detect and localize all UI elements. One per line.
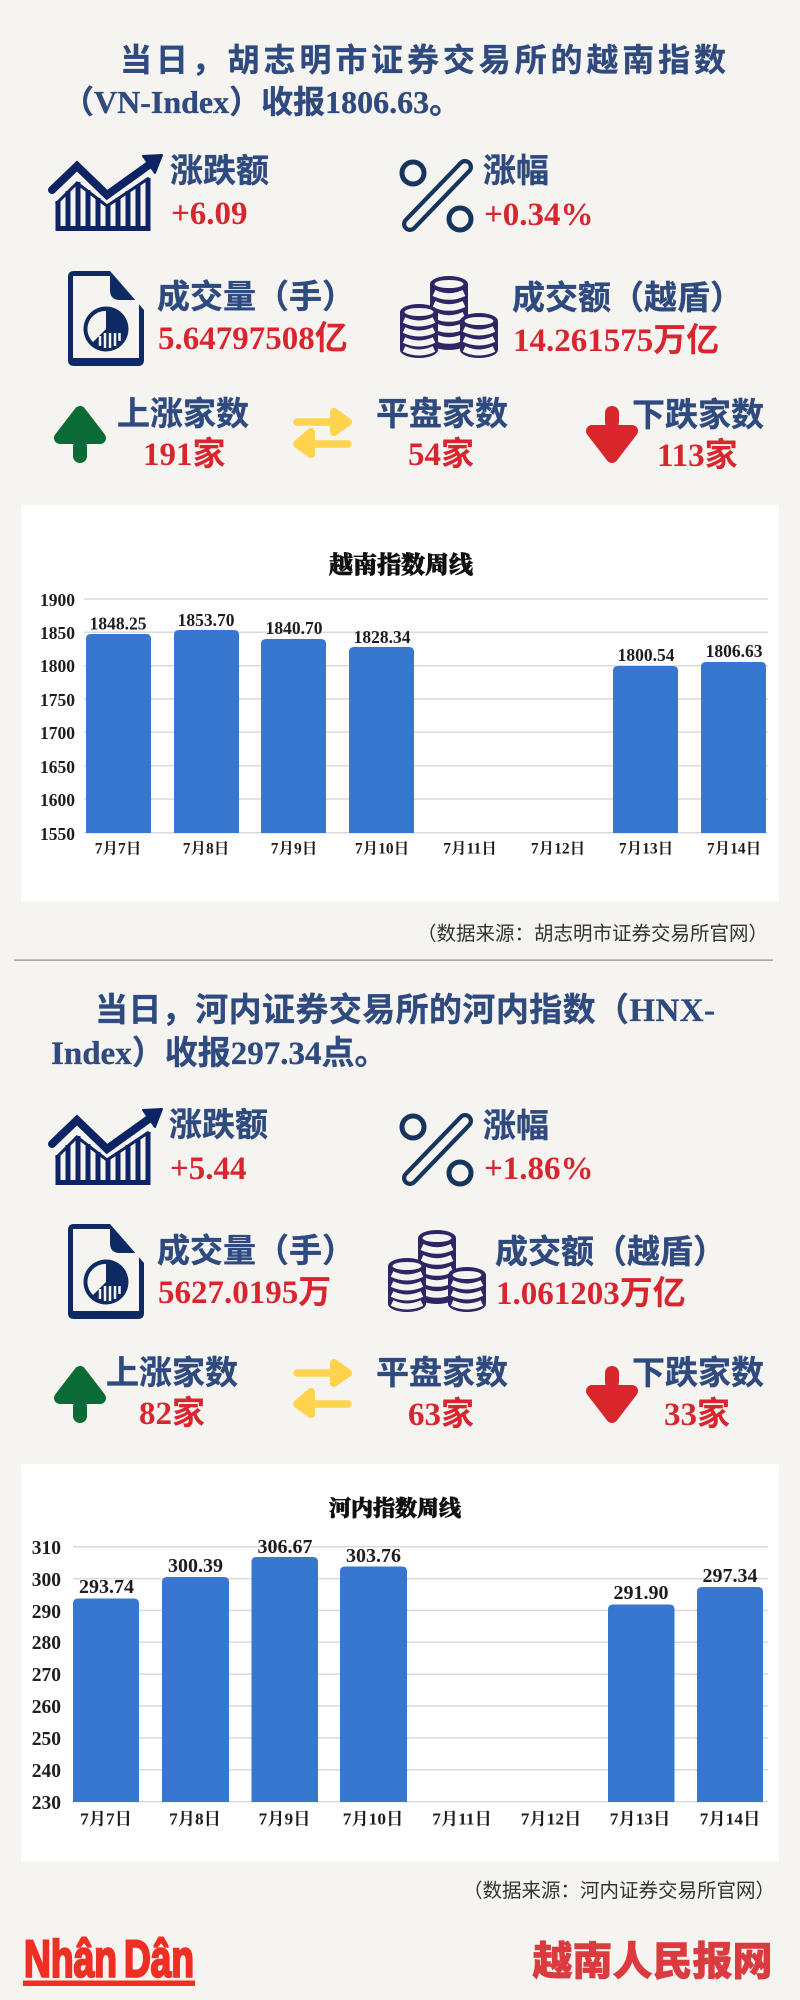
x axis: 7月12日 xyxy=(521,1810,581,1828)
stat: decliners: 下跌家数 xyxy=(632,397,764,434)
stat: change amount: 涨跌额 xyxy=(169,1107,268,1144)
chart title: 河内指数周线 xyxy=(329,1496,461,1521)
stat: turnover: 成交额（越盾） xyxy=(495,1234,726,1271)
stat: volume: 成交量（手） xyxy=(157,1233,355,1270)
bar values: 1828.34 xyxy=(354,627,411,647)
x axis: 7月14日 xyxy=(707,840,761,858)
y axis: 1850 xyxy=(40,623,75,643)
icon: yellow exchange arrows xyxy=(297,412,348,454)
icon: trend chart xyxy=(52,1109,162,1185)
stat: decliners: 33家 xyxy=(664,1396,730,1433)
icon: coin stacks xyxy=(388,1230,486,1312)
stat: unchanged: 平盘家数 xyxy=(376,396,508,433)
y axis: 300 xyxy=(32,1570,61,1591)
bar values xyxy=(79,1536,758,1604)
stat: change amount: +6.09 xyxy=(171,196,248,232)
stat: change percent: +1.86% xyxy=(484,1151,594,1187)
stat: turnover: 成交额（越盾） xyxy=(512,280,743,317)
stat: change amount xyxy=(170,153,269,232)
icon: red down arrow xyxy=(592,1366,632,1417)
section: VN-Index title: （VN-Index）收报1806.63。 xyxy=(62,84,461,120)
stat: turnover xyxy=(512,280,743,359)
icon: coin stacks xyxy=(400,276,498,358)
stat: change amount: 涨跌额 xyxy=(170,153,269,190)
bar values: 303.76 xyxy=(346,1545,401,1567)
stat: unchanged: 平盘家数 xyxy=(376,1355,508,1392)
logo: Nhan Dan: Nhân xyxy=(24,1930,117,1988)
panel: HNX-Index weekly chart xyxy=(21,1464,779,1862)
stat: advancers xyxy=(117,396,249,473)
bar values: 293.74 xyxy=(79,1576,134,1598)
section: VN-Index title xyxy=(62,42,726,120)
stat: unchanged: 54家 xyxy=(408,436,474,473)
stat: advancers: 上涨家数 xyxy=(117,396,249,433)
x axis: 7月10日 xyxy=(343,1810,403,1828)
bar values: 297.34 xyxy=(702,1565,758,1587)
y axis: 1650 xyxy=(40,757,75,777)
stat: change percent xyxy=(483,1108,594,1187)
bar values: 1800.54 xyxy=(618,645,675,665)
logo: Nhan Dan: Dân xyxy=(124,1930,194,1988)
stat: turnover: 14.261575万亿 xyxy=(513,322,719,359)
x axis: 7月7日 xyxy=(95,840,141,858)
x axis xyxy=(80,1810,760,1828)
y axis: 290 xyxy=(32,1602,61,1623)
bar values: 300.39 xyxy=(168,1555,223,1577)
bar values: 306.67 xyxy=(258,1536,312,1558)
section: HNX-Index title: 当日，河内证券交易所的河内指数（HNX- xyxy=(95,992,715,1029)
chart title: 越南指数周线 xyxy=(329,551,473,579)
y axis xyxy=(32,1538,61,1814)
stat: advancers xyxy=(106,1355,238,1432)
y axis: 1550 xyxy=(40,824,75,844)
stat: change percent: +0.34% xyxy=(484,197,594,233)
icon: document with pie xyxy=(68,271,144,366)
x axis: 7月14日 xyxy=(700,1810,760,1828)
y axis: 1600 xyxy=(40,790,75,810)
stat: advancers: 82家 xyxy=(139,1395,205,1432)
icon: green up arrow xyxy=(60,1372,100,1423)
section: HNX-Index title xyxy=(51,992,715,1072)
y axis: 260 xyxy=(32,1697,61,1718)
y axis: 230 xyxy=(32,1793,61,1814)
bar values: 1848.25 xyxy=(90,614,147,634)
x axis: 7月9日 xyxy=(271,840,317,858)
icon: document with pie xyxy=(68,1224,144,1319)
x axis: 7月13日 xyxy=(619,840,673,858)
stat: change amount: +5.44 xyxy=(170,1151,247,1187)
x axis: 7月10日 xyxy=(355,840,409,858)
stat: turnover xyxy=(495,1234,726,1312)
bar values: 1840.70 xyxy=(266,618,323,638)
stat: change percent: 涨幅 xyxy=(483,1108,549,1145)
x axis: 7月8日 xyxy=(183,840,229,858)
y axis: 250 xyxy=(32,1729,61,1750)
bar values: 291.90 xyxy=(614,1582,668,1604)
y axis: 1750 xyxy=(40,690,75,710)
stat: change percent: 涨幅 xyxy=(483,153,549,190)
panel: VN-Index weekly chart xyxy=(21,505,779,902)
x axis: 7月11日 xyxy=(432,1810,492,1828)
stat: volume: 成交量（手） xyxy=(157,279,355,316)
bar values xyxy=(90,610,763,665)
x axis: 7月7日 xyxy=(80,1810,132,1828)
stat: advancers: 191家 xyxy=(143,436,226,473)
stat: turnover: 1.061203万亿 xyxy=(496,1275,686,1312)
y axis: 1900 xyxy=(40,590,75,610)
bar values: 1853.70 xyxy=(178,610,235,630)
x axis: 7月13日 xyxy=(610,1810,670,1828)
x axis: 7月8日 xyxy=(169,1810,221,1828)
y axis: 1700 xyxy=(40,723,75,743)
stat: volume: 5.64797508亿 xyxy=(158,320,348,357)
bars xyxy=(86,630,766,833)
stat: volume xyxy=(157,1233,355,1311)
section: VN-Index title: 当日，胡志明市证券交易所的越南指数 xyxy=(120,42,726,78)
icon: yellow exchange arrows xyxy=(297,1363,348,1414)
source note: （数据来源：河内证券交易所官网） xyxy=(463,1874,775,1903)
y axis: 310 xyxy=(32,1538,61,1559)
stat: volume xyxy=(157,279,355,357)
icon: trend chart xyxy=(52,155,162,231)
stat: volume: 5627.0195万 xyxy=(158,1275,331,1311)
footer brand: 越南人民报网 xyxy=(532,1929,772,1987)
y axis: 1800 xyxy=(40,656,75,676)
bar values: 1806.63 xyxy=(706,641,763,661)
y axis: 270 xyxy=(32,1665,61,1686)
stat: unchanged xyxy=(376,1355,508,1433)
x axis: 7月11日 xyxy=(443,840,497,858)
stat: unchanged: 63家 xyxy=(408,1396,474,1433)
stat: change percent xyxy=(483,153,594,233)
stat: change amount xyxy=(169,1107,268,1187)
icon: red down arrow xyxy=(592,406,632,457)
y axis: 240 xyxy=(32,1761,61,1782)
icon: green up arrow xyxy=(60,412,100,463)
section: HNX-Index title: Index）收报297.34点。 xyxy=(51,1035,387,1072)
stat: decliners xyxy=(632,1355,764,1433)
source note: （数据来源：胡志明市证券交易所官网） xyxy=(417,917,768,946)
bars xyxy=(73,1557,763,1802)
y axis xyxy=(40,590,75,844)
stat: decliners xyxy=(632,397,764,474)
stat: advancers: 上涨家数 xyxy=(106,1355,238,1392)
icon: percent xyxy=(402,162,471,230)
stat: decliners: 下跌家数 xyxy=(632,1355,764,1392)
icon: percent xyxy=(402,1116,471,1184)
y axis: 280 xyxy=(32,1633,61,1654)
stat: unchanged xyxy=(376,396,508,473)
stat: decliners: 113家 xyxy=(657,437,738,474)
x axis: 7月12日 xyxy=(531,840,585,858)
x axis xyxy=(95,840,761,858)
x axis: 7月9日 xyxy=(259,1810,310,1828)
